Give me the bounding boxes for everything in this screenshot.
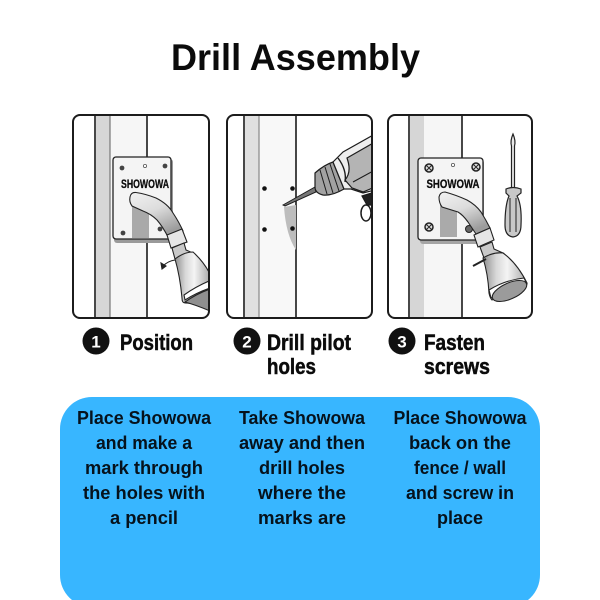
text: step 2 instructions: [239, 408, 366, 528]
step 2 label: Drill pilot: [267, 330, 352, 355]
step 1 label: [82, 328, 193, 355]
panel: instructions: [60, 397, 540, 600]
icon: screwdriver: [505, 134, 521, 237]
icon: shower head: [439, 192, 530, 306]
text: step 3 instructions: Place Showowa: [394, 408, 527, 428]
text: step 2 instructions: where the: [257, 483, 346, 503]
step 3 label: Fasten: [424, 330, 485, 355]
text: step 1 instructions: the holes with: [83, 483, 205, 503]
step 1 label: Position: [120, 330, 193, 355]
step 2 label: holes: [267, 354, 316, 379]
text: step 2 instructions: away and then: [239, 433, 365, 453]
icon: mounting plate with screws: SHOWOWA: [426, 177, 480, 191]
step 2 label: [234, 328, 352, 379]
text: step 3 instructions: place: [437, 508, 483, 528]
panel: position: [73, 115, 210, 318]
text: step 2 instructions: Take Showowa: [239, 408, 366, 428]
text: step 1 instructions: and make a: [96, 433, 193, 453]
icon: mounting plate with screws: [418, 158, 484, 244]
panel: drill pilot holes: [227, 115, 375, 318]
text: step 3 instructions: [394, 408, 527, 528]
text: step 2 instructions: drill holes: [259, 458, 345, 478]
text: step 3 instructions: fence / wall: [414, 458, 506, 478]
step 1 label: 1: [91, 332, 101, 352]
text: step 2 instructions: marks are: [258, 508, 346, 528]
step 3 label: screws: [424, 354, 490, 379]
text: step 3 instructions: and screw in: [406, 483, 514, 503]
text: step 1 instructions: mark through: [85, 458, 203, 478]
text: step 1 instructions: Place Showowa: [77, 408, 212, 428]
step 3 label: 3: [397, 332, 407, 352]
panel: fasten screws: [388, 115, 532, 318]
title: Drill Assembly: [171, 37, 420, 78]
icon: shower head: [130, 192, 210, 311]
icon: mounting plate: [113, 157, 173, 243]
text: step 3 instructions: back on the: [409, 433, 511, 453]
icon: mounting plate: SHOWOWA: [121, 179, 169, 191]
step 3 label: [388, 328, 490, 379]
step 2 label: 2: [242, 332, 252, 352]
text: step 1 instructions: a pencil: [110, 508, 178, 528]
text: step 1 instructions: [77, 408, 212, 528]
icon: pilot holes: [262, 186, 295, 232]
icon: drill: [283, 134, 375, 221]
